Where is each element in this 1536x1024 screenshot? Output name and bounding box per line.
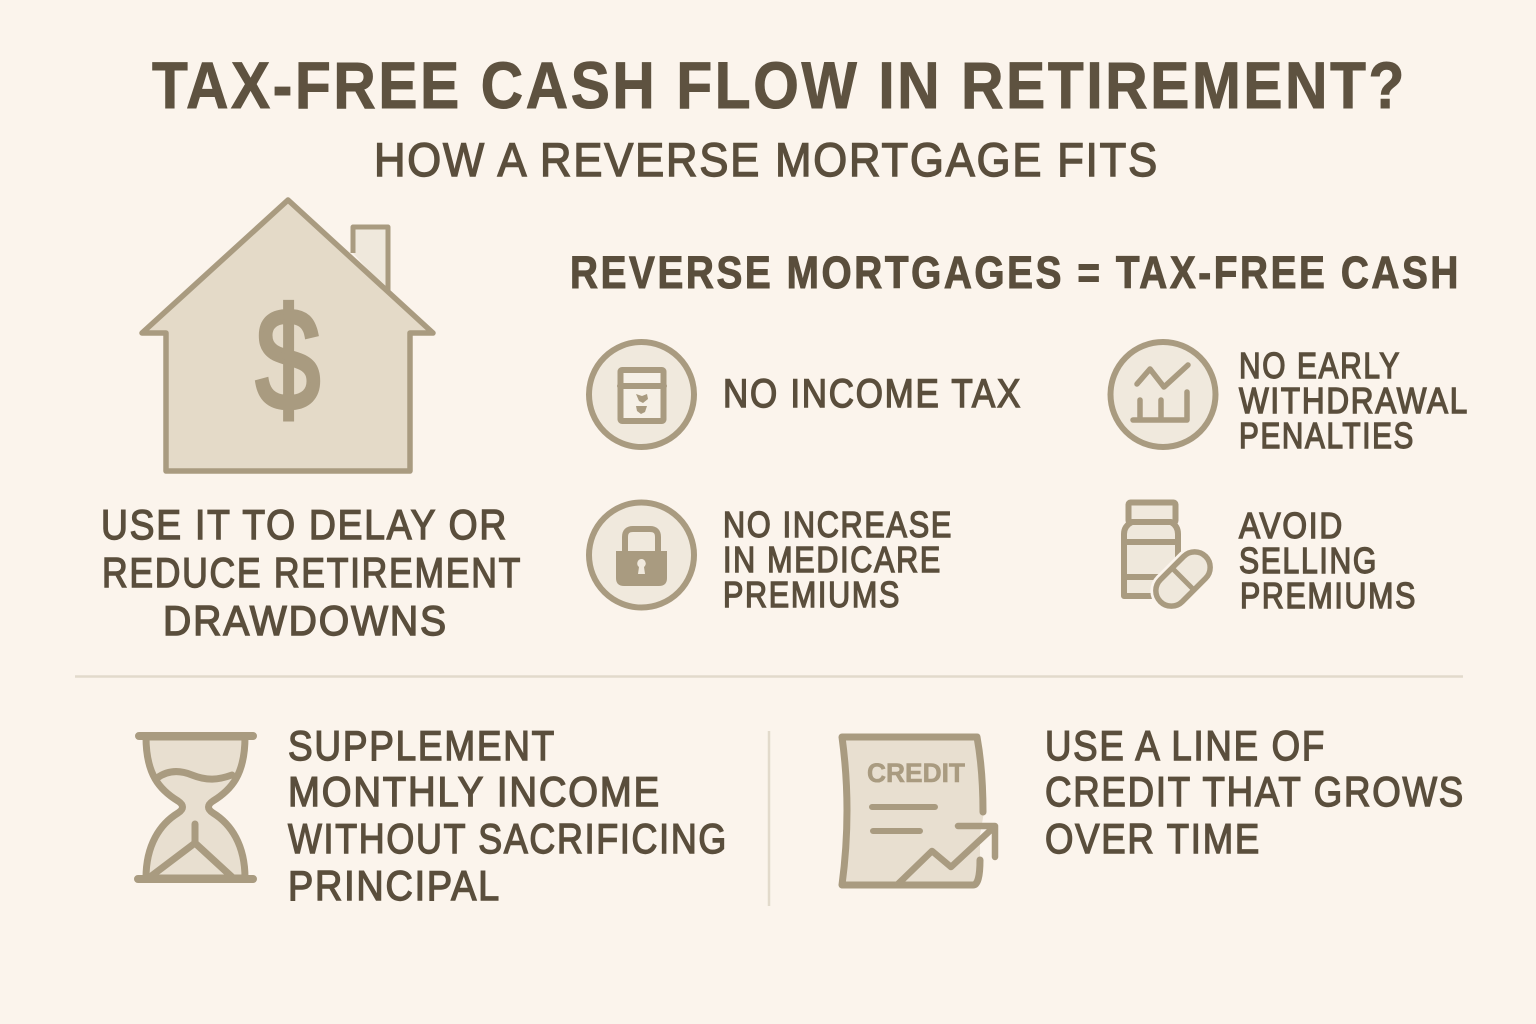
label: no income tax: NO INCOME TAX [723, 372, 1022, 416]
icon: chart in circle [1110, 342, 1216, 447]
text block: supplement monthly income: WITHOUT SACRIFICING [288, 815, 728, 862]
label: no increase in medicare premiums [723, 504, 953, 615]
label: no early withdrawal penalties: NO EARLY [1239, 345, 1401, 386]
chimney [353, 227, 388, 292]
label: no increase in medicare premiums: PREMIUMS [723, 574, 901, 615]
label: avoid selling premiums: PREMIUMS [1240, 575, 1417, 616]
label: no early withdrawal penalties: PENALTIES [1239, 415, 1415, 456]
text block: line of credit: USE A LINE OF [1045, 722, 1326, 769]
label: no early withdrawal penalties: WITHDRAWAL [1239, 380, 1469, 421]
text block: supplement monthly income [288, 722, 728, 909]
icon: padlock in circle [589, 502, 694, 608]
text block: line of credit [1045, 722, 1465, 862]
icon: credit document with rising arrow [842, 737, 995, 885]
subtitle: HOW A REVERSE MORTGAGE FITS [374, 133, 1159, 186]
icon: house with dollar sign [142, 200, 433, 471]
icon: hourglass [138, 736, 253, 879]
text block: delay or reduce drawdowns: REDUCE RETIREMENT [102, 549, 522, 596]
label: avoid selling premiums: AVOID [1239, 505, 1344, 546]
label: no increase in medicare premiums: IN MEDICARE [723, 539, 942, 580]
label: avoid selling premiums [1239, 505, 1417, 616]
icon: calculator in circle [589, 342, 694, 447]
text block: delay or reduce drawdowns: USE IT TO DELAY OR [101, 501, 508, 548]
text block: supplement monthly income: PRINCIPAL [288, 862, 501, 909]
label: avoid selling premiums: SELLING [1239, 540, 1378, 581]
text block: line of credit: OVER TIME [1045, 815, 1261, 862]
label: no early withdrawal penalties [1239, 345, 1469, 456]
text block: supplement monthly income: MONTHLY INCOME [288, 768, 661, 815]
icon: pill bottle and capsule [1124, 502, 1217, 613]
text block: delay or reduce drawdowns [101, 501, 522, 644]
title: TAX-FREE CASH FLOW IN RETIREMENT? [152, 48, 1407, 122]
text block: line of credit: CREDIT THAT GROWS [1045, 768, 1465, 815]
dollar sign: $ [256, 279, 320, 440]
text block: delay or reduce drawdowns: DRAWDOWNS [163, 597, 448, 644]
label: no increase in medicare premiums: NO INCREASE [723, 504, 953, 545]
credit label: CREDIT [867, 758, 965, 788]
house outline [142, 200, 433, 471]
text block: supplement monthly income: SUPPLEMENT [288, 722, 556, 769]
